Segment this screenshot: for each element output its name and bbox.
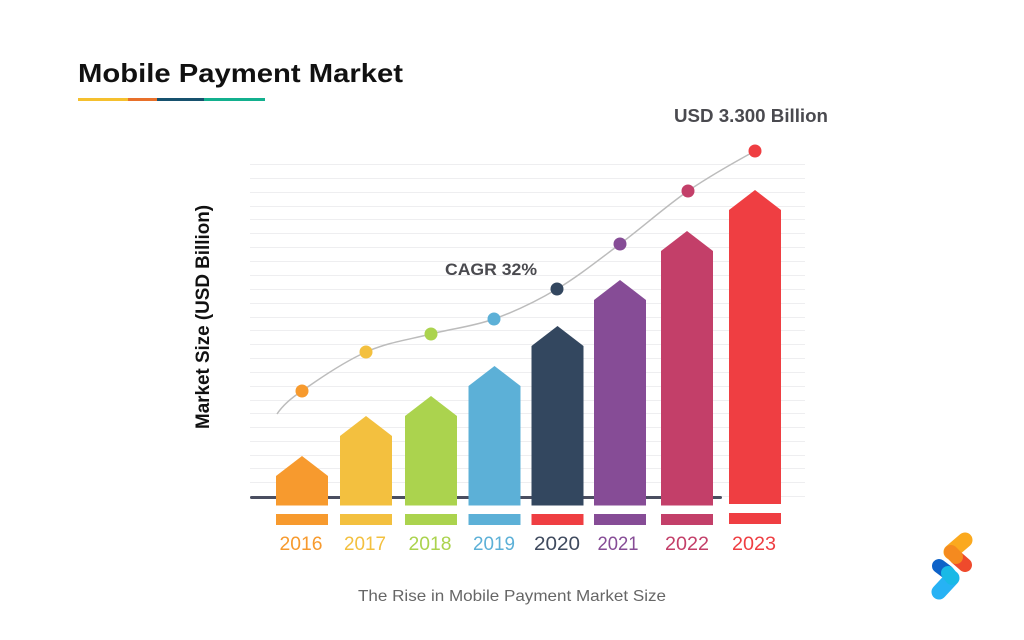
bar 2021: 2021 <box>598 534 638 555</box>
bar 2023: 2023 <box>732 534 776 555</box>
bar 2016 <box>276 384 328 555</box>
bar 2022: 2022 <box>665 534 709 555</box>
CAGR label: CAGR 32% <box>445 260 537 279</box>
bar 2018: 2018 <box>408 534 452 555</box>
caption: The Rise in Mobile Payment Market Size <box>358 588 666 605</box>
y-axis label: Market Size (USD Billion) <box>193 205 214 429</box>
bar 2016: 2016 <box>280 534 322 555</box>
bar 2019: 2019 <box>473 534 515 555</box>
trend curve <box>277 151 755 414</box>
bar 2022 <box>661 184 713 555</box>
bar 2017: 2017 <box>344 534 386 555</box>
bar 2020 <box>532 282 584 555</box>
baseline axis <box>250 496 722 499</box>
bar 2019 <box>468 312 520 555</box>
bar 2017 <box>340 346 392 555</box>
peak value label: USD 3.300 Billion <box>674 106 828 126</box>
bar 2023 <box>729 144 781 555</box>
bar 2021 <box>594 238 646 555</box>
title underline <box>78 98 265 101</box>
bar 2020: 2020 <box>534 534 580 555</box>
icon: logo <box>939 540 965 592</box>
bar 2018 <box>405 328 457 555</box>
title: Mobile Payment Market <box>78 58 403 88</box>
